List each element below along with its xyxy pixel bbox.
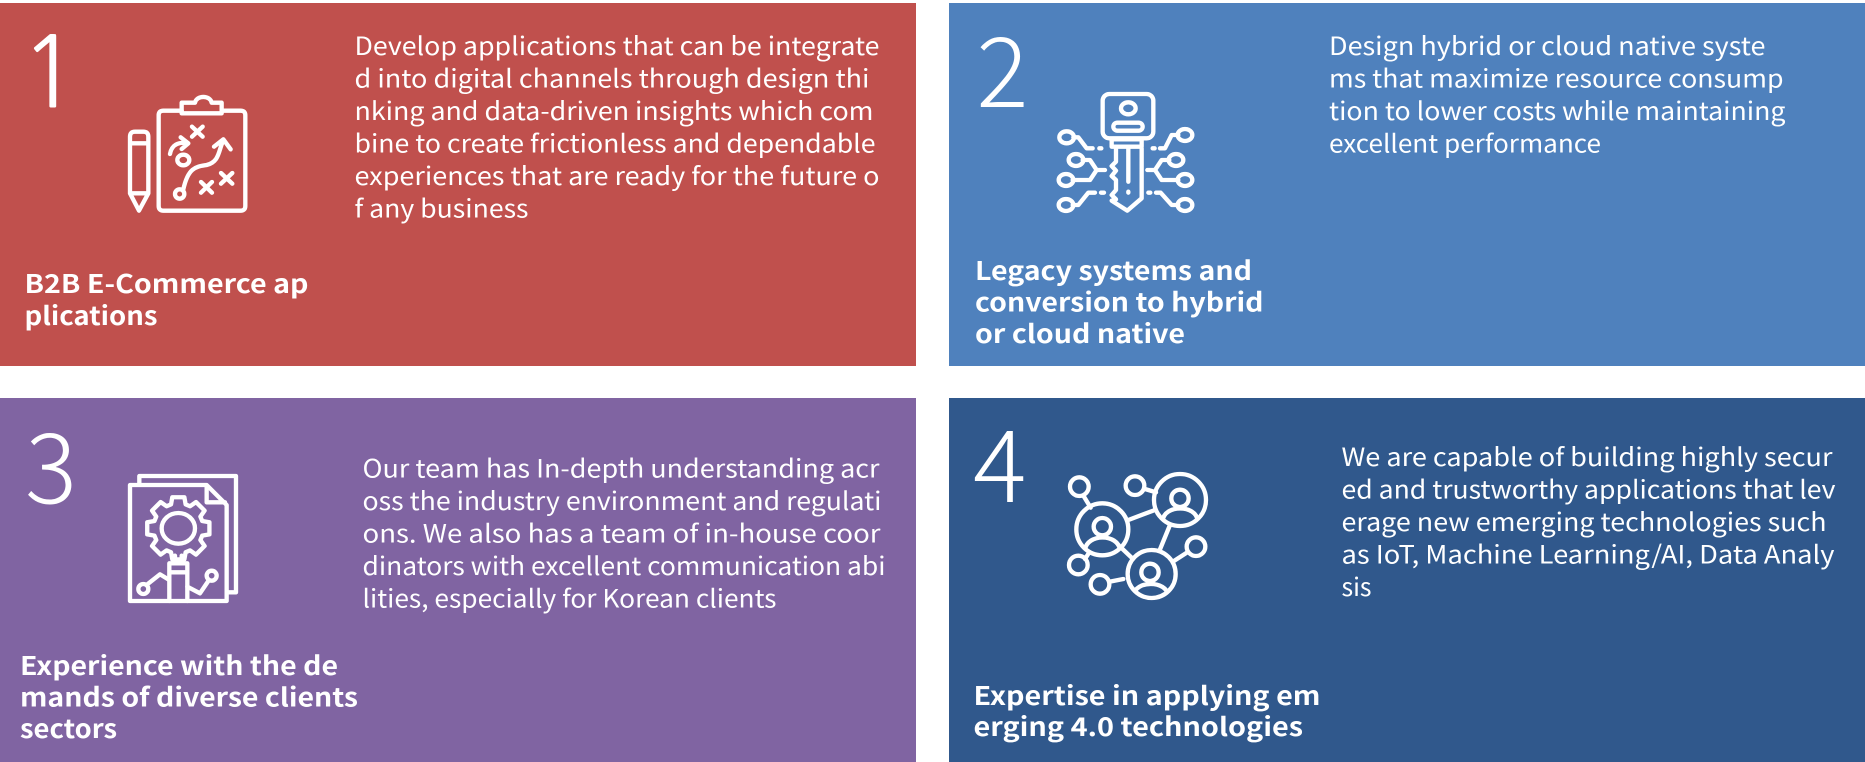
panel 2 description: Design hybrid or cloud native syste bbox=[1329, 27, 1766, 63]
panel 1 title: plications bbox=[24, 296, 158, 333]
panel: legacy systems bbox=[949, 0, 1865, 366]
panel 1 description: experiences that are ready for the future o bbox=[354, 157, 880, 193]
panel 3 title: sectors bbox=[20, 709, 117, 746]
panel 4 description: erage new emerging technologies such bbox=[1342, 503, 1826, 539]
panel 3 title bbox=[20, 646, 358, 746]
panel 2 title bbox=[975, 251, 1264, 351]
panel 4 description: ed and trustworthy applications that lev bbox=[1342, 470, 1836, 506]
icon: clipboard game plan with pencil bbox=[130, 97, 245, 211]
icon: connected people network bbox=[1069, 474, 1206, 598]
icon: documents with gear bbox=[130, 476, 236, 601]
panel 4 title: Expertise in applying em bbox=[974, 676, 1320, 713]
panel 1 description: nking and data-driven insights which com bbox=[354, 92, 874, 128]
panel 1 title bbox=[24, 264, 308, 333]
panel 3 description: Our team has In-depth understanding acr bbox=[362, 450, 880, 486]
panel: diverse clients experience bbox=[0, 390, 916, 762]
panel 1 title: B2B E-Commerce ap bbox=[24, 264, 308, 301]
panel 1 description: Develop applications that can be integrate bbox=[354, 27, 880, 63]
panel 4 title bbox=[974, 676, 1320, 744]
panel 2 description: ms that maximize resource consump bbox=[1329, 60, 1784, 96]
panel 2 description: excellent performance bbox=[1329, 124, 1601, 160]
number 3: 3 bbox=[25, 390, 77, 531]
panel 1 description: f any business bbox=[354, 190, 528, 226]
panel 3 description: oss the industry environment and regulati bbox=[362, 482, 882, 518]
panel 3 title: mands of diverse clients bbox=[20, 678, 358, 714]
panel 3 description: ons. We also has a team of in-house coor bbox=[362, 514, 881, 550]
panel: emerging technologies bbox=[949, 386, 1865, 762]
panel 3 description: lities, especially for Korean clients bbox=[362, 580, 776, 616]
panel 1 description: d into digital channels through design thi bbox=[354, 60, 870, 96]
number 4: 4 bbox=[973, 386, 1026, 531]
icon: digital key with circuits bbox=[1059, 94, 1192, 211]
panel 1 description bbox=[354, 27, 880, 226]
panel 2 description: tion to lower costs while maintaining bbox=[1329, 92, 1786, 128]
panel 4 description: sis bbox=[1342, 568, 1372, 604]
panel 1 description: bine to create frictionless and dependable bbox=[354, 124, 876, 160]
panel 2 description bbox=[1329, 27, 1786, 160]
panel: B2B E-Commerce applications bbox=[0, 3, 916, 366]
panel 4 description: We are capable of building highly secur bbox=[1342, 438, 1833, 474]
panel 2 title: Legacy systems and bbox=[975, 251, 1252, 288]
panel 4 description bbox=[1342, 438, 1836, 604]
panel 2 title: or cloud native bbox=[975, 314, 1185, 351]
panel 4 description: as IoT, Machine Learning/AI, Data Analy bbox=[1342, 536, 1834, 572]
panel 2 title: conversion to hybrid bbox=[975, 282, 1264, 320]
panel 3 description bbox=[362, 450, 886, 616]
number 1: 1 bbox=[20, 24, 79, 122]
panel 3 description: dinators with excellent communication abi bbox=[362, 547, 886, 583]
panel 4 title: erging 4.0 technologies bbox=[974, 707, 1303, 744]
panel 3 title: Experience with the de bbox=[20, 646, 338, 683]
